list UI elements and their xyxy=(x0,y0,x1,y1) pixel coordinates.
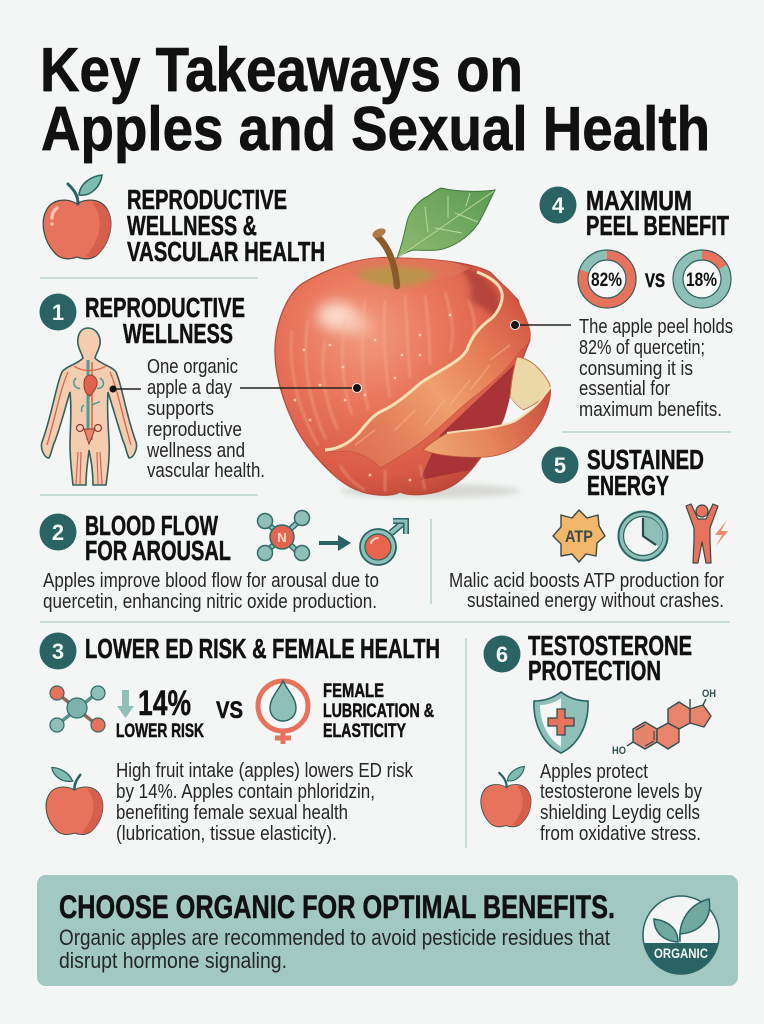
badge 1 xyxy=(40,294,76,330)
heading 4: MAXIMUM xyxy=(586,185,692,216)
icon: apple xyxy=(481,766,531,827)
text 6: shielding Leydig cells xyxy=(540,801,700,824)
stat: 14 percent lower risk: LOWER RISK xyxy=(116,721,204,742)
leaf xyxy=(397,188,495,258)
heading 1: REPRODUCTIVE xyxy=(85,292,245,323)
text 6 xyxy=(540,760,703,845)
badge 4 xyxy=(540,186,576,224)
icon: testosterone molecule xyxy=(612,688,716,757)
icon: organic badge xyxy=(643,896,719,974)
heading: reproductive wellness and vascular health xyxy=(127,184,325,267)
text 4: essential for xyxy=(579,377,670,400)
icon: shield with cross xyxy=(534,692,588,753)
icon: header apple xyxy=(43,175,111,259)
text 2: Apples improve blood flow for arousal due to xyxy=(43,569,379,592)
text 4: The apple peel holds xyxy=(579,315,733,338)
title xyxy=(40,36,710,164)
text 1: wellness and xyxy=(146,439,245,462)
icon: apple xyxy=(46,767,103,835)
text 3: by 14%. Apples contain phloridzin, xyxy=(116,780,375,803)
badge 3 xyxy=(40,632,76,670)
heading 5: SUSTAINED xyxy=(587,444,704,475)
text 1 xyxy=(146,355,265,482)
panel: 3 lower ED risk and female health xyxy=(40,632,440,845)
panel: 6 testosterone protection xyxy=(481,630,716,845)
badge 6: 6 xyxy=(496,642,508,667)
outer peel band xyxy=(423,387,551,457)
text 1: reproductive xyxy=(147,418,242,441)
icon: clock xyxy=(618,512,668,560)
main peel xyxy=(325,272,530,468)
badge 2: 2 xyxy=(52,520,64,545)
callout heading: CHOOSE ORGANIC FOR OPTIMAL BENEFITS. xyxy=(59,889,615,925)
heading 2 xyxy=(85,510,231,566)
icon: ATP starburst: ATP xyxy=(565,527,593,546)
badge 3: 3 xyxy=(52,639,64,664)
peel cream inner xyxy=(510,357,550,410)
badge 1: 1 xyxy=(52,300,64,325)
stat: 14 percent lower risk xyxy=(116,684,204,742)
heading 5 xyxy=(587,444,704,501)
text 3: (lubrication, tissue elasticity). xyxy=(116,822,337,845)
text 5 xyxy=(449,569,724,612)
text 2 xyxy=(43,569,379,613)
icon: male symbol xyxy=(360,521,406,565)
icon: female symbol with droplet xyxy=(258,681,308,744)
text 1: vascular health. xyxy=(147,459,265,482)
heading 1 xyxy=(85,292,245,349)
text 1: One organic xyxy=(147,355,238,378)
connector: peel to text 4 xyxy=(510,320,571,330)
icon: energetic person xyxy=(686,504,728,563)
text 4 xyxy=(579,315,733,421)
heading: reproductive wellness and vascular health: WELLNESS & xyxy=(127,210,257,241)
text 1: apple a day xyxy=(147,376,233,399)
icon: human body with circulatory system xyxy=(41,328,137,485)
heading 2: BLOOD FLOW xyxy=(85,510,218,541)
text 3 xyxy=(116,759,414,845)
text 6: testosterone levels by xyxy=(540,780,703,803)
panel: 1 reproductive wellness xyxy=(40,292,265,485)
heading 5: ENERGY xyxy=(587,470,669,501)
label: vs: VS xyxy=(645,271,665,292)
icon: nitric oxide molecule: N xyxy=(277,530,287,545)
badge 6 xyxy=(484,636,520,672)
chart: 18% donut: 18% xyxy=(686,270,717,291)
chart: 82% donut xyxy=(578,250,636,308)
connector: apple to text 1 xyxy=(240,384,362,392)
icon: testosterone molecule: HO xyxy=(612,745,626,757)
badge 4: 4 xyxy=(552,193,565,218)
heading: reproductive wellness and vascular health: REPRODUCTIVE xyxy=(127,184,287,215)
badge 5 xyxy=(542,446,578,484)
heading 6: TESTOSTERONE xyxy=(528,630,692,661)
heading 2: FOR AROUSAL xyxy=(85,535,231,566)
callout text: Organic apples are recommended to avoid pesticide residues that xyxy=(59,925,610,950)
callout text xyxy=(59,925,610,973)
label: vs: VS xyxy=(216,697,243,724)
heading: reproductive wellness and vascular health: VASCULAR HEALTH xyxy=(127,236,325,267)
chart: 82% donut: 82% xyxy=(591,270,622,291)
title: Key Takeaways on xyxy=(40,36,523,105)
panel: 5 sustained energy xyxy=(449,444,728,612)
text 6: Apples protect xyxy=(540,760,648,783)
text 3: benefiting female sexual health xyxy=(116,801,348,824)
connector dot: body xyxy=(110,386,141,392)
icon: nitric oxide molecule xyxy=(258,510,310,560)
stem xyxy=(377,236,397,286)
text 1: supports xyxy=(147,397,214,420)
central apple illustration xyxy=(275,188,551,498)
text 3: High fruit intake (apples) lowers ED risk xyxy=(116,759,414,782)
label: female lubrication and elasticity: ELASTICITY xyxy=(323,721,406,742)
stat: 14 percent lower risk: 14% xyxy=(138,684,191,723)
heading 1: WELLNESS xyxy=(123,318,233,349)
hole xyxy=(503,397,523,422)
icon: phloridzin molecule xyxy=(50,686,105,732)
panel: 4 maximum peel benefit xyxy=(540,185,733,421)
arrow xyxy=(319,535,351,551)
text 4: maximum benefits. xyxy=(579,398,722,421)
label: female lubrication and elasticity: LUBRICATION & xyxy=(323,701,434,722)
heading 4 xyxy=(586,185,729,241)
icon: testosterone molecule: OH xyxy=(702,688,716,700)
label: female lubrication and elasticity xyxy=(323,681,434,742)
icon: organic badge: ORGANIC xyxy=(654,945,708,961)
panel: choose organic callout xyxy=(37,875,738,986)
label: female lubrication and elasticity: FEMALE xyxy=(323,681,384,702)
panel: 2 blood flow for arousal xyxy=(40,510,406,613)
heading 6: PROTECTION xyxy=(528,655,661,686)
heading 3: LOWER ED RISK & FEMALE HEALTH xyxy=(85,633,440,664)
icon: ATP starburst xyxy=(553,510,605,562)
text 4: 82% of quercetin; xyxy=(579,336,705,359)
heading 6 xyxy=(528,630,692,686)
text 2: quercetin, enhancing nitric oxide production. xyxy=(43,590,377,613)
text 4: consuming it is xyxy=(579,357,693,380)
callout text: disrupt hormone signaling. xyxy=(59,948,287,973)
chart: 18% donut xyxy=(673,250,731,308)
apple body xyxy=(275,258,530,495)
text 6: from oxidative stress. xyxy=(540,822,701,845)
badge 5: 5 xyxy=(554,453,566,478)
badge 2 xyxy=(40,514,76,550)
